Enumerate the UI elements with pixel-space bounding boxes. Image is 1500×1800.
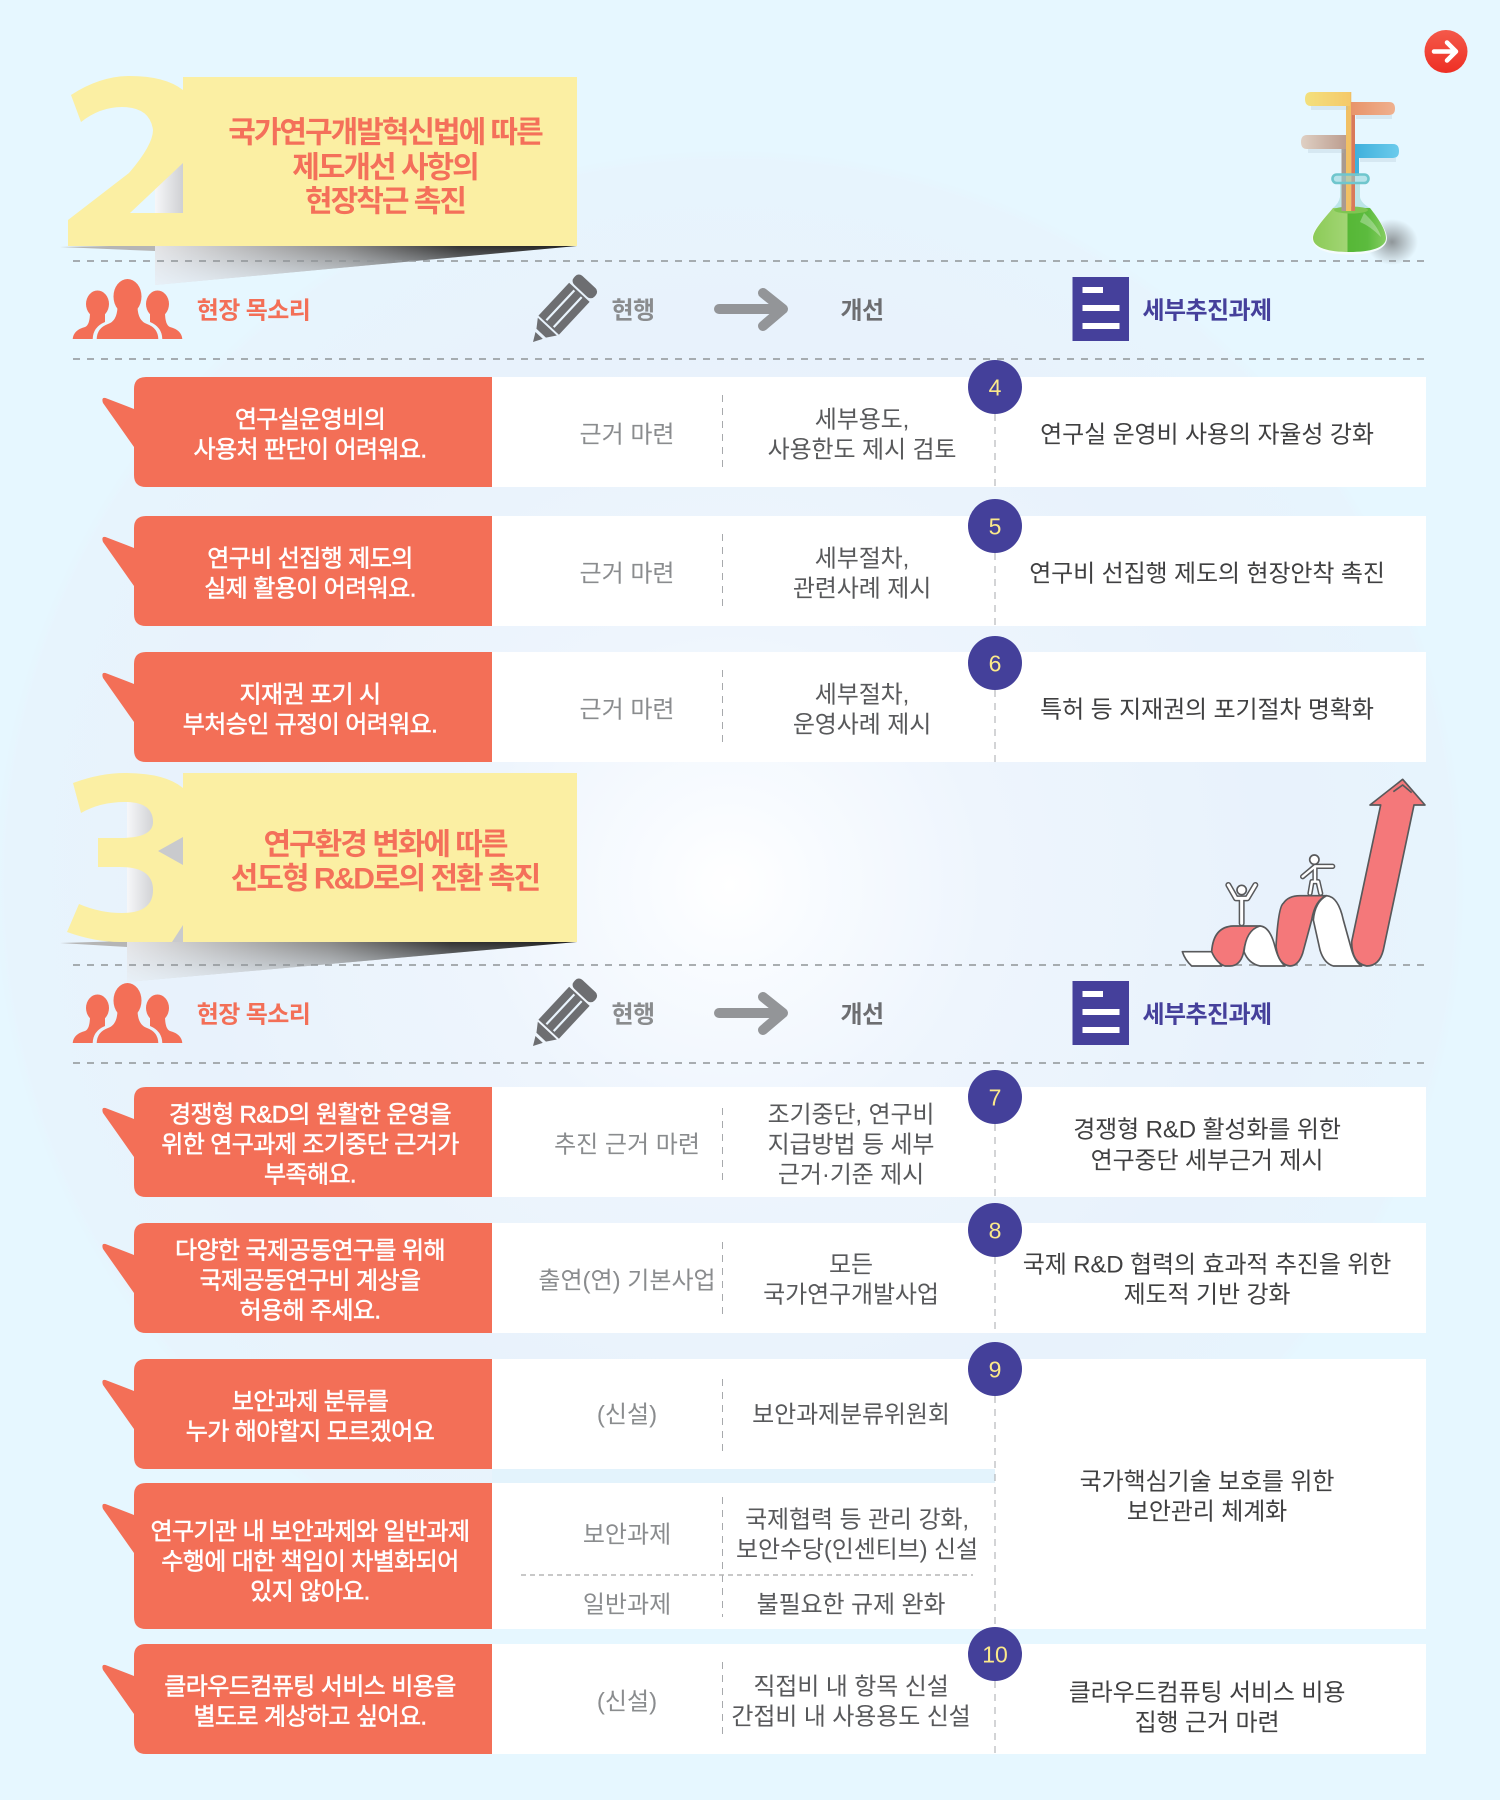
- title box: [183, 773, 577, 942]
- title box: 연구환경 변화에 따른: [263, 828, 508, 862]
- badge 5: [968, 499, 1022, 553]
- bubble: classification: 보안과제 분류를: [232, 1388, 388, 1416]
- badge 7: 7: [989, 1084, 1001, 1110]
- table cells: 연구중단 세부근거 제시: [1091, 1148, 1323, 1174]
- icon: red next arrow button: [1424, 30, 1468, 73]
- header: current: 현행: [612, 1002, 654, 1028]
- table cells: 연구실 운영비 사용의 자율성 강화: [1040, 422, 1374, 448]
- bubble: 연구비 선집행 제도의: [207, 546, 413, 572]
- badge 6: [968, 636, 1022, 690]
- panel: section 3 column headers: [73, 976, 1271, 1056]
- table cells: 보안관리 체계화: [1127, 1498, 1287, 1526]
- bubble: 다양한 국제공동연구를 위해: [175, 1238, 445, 1264]
- row 6: [102, 652, 1426, 762]
- bubble: 국제공동연구비 계상을: [200, 1268, 420, 1294]
- badge 5: 5: [989, 514, 1001, 540]
- icon: document: [1072, 981, 1129, 1045]
- table cells: 클라우드컴퓨팅 서비스 비용: [1069, 1680, 1345, 1706]
- table cells: 보안수당(인센티브) 신설: [736, 1536, 978, 1564]
- badge 10: 10: [982, 1642, 1008, 1668]
- arrow: [719, 293, 783, 326]
- header: detailed tasks: 세부추진과제: [1143, 298, 1271, 324]
- row 5: [102, 516, 1426, 626]
- table cells: 모든: [829, 1252, 873, 1278]
- row 7: [102, 1087, 1426, 1197]
- table cells: 근거 마련: [580, 696, 674, 724]
- row 4: [102, 377, 1426, 487]
- table cells: 국가핵심기술 보호를 위한: [1080, 1468, 1334, 1496]
- arrow: [719, 997, 783, 1030]
- bubble: classification: [102, 1359, 492, 1469]
- header: improvement: 개선: [841, 1002, 883, 1028]
- bubble: 부처승인 규정이 어려워요.: [183, 712, 437, 738]
- table cells: 지급방법 등 세부: [768, 1132, 934, 1158]
- table cells: 집행 근거 마련: [1135, 1710, 1279, 1736]
- table cells: 특허 등 지재권의 포기절차 명확화: [1040, 696, 1374, 724]
- badge 7: [968, 1070, 1022, 1124]
- row 10: [102, 1644, 1426, 1754]
- table cells: 조기중단, 연구비: [768, 1102, 934, 1128]
- title box: 선도형 R&D로의 전환 촉진: [231, 862, 540, 896]
- bubble: 별도로 계상하고 싶어요.: [193, 1704, 427, 1730]
- bubble: responsibility: 연구기관 내 보안과제와 일반과제: [151, 1518, 469, 1546]
- bubble: classification: 누가 해야할지 모르겠어요: [186, 1418, 434, 1446]
- badge 8: [968, 1203, 1022, 1257]
- table cells: 일반과제: [583, 1592, 671, 1618]
- badge 9: 9: [989, 1356, 1001, 1382]
- table cells: 근거 마련: [580, 560, 674, 588]
- dashed divider section 3: [73, 965, 1426, 1063]
- table cells: 관련사례 제시: [793, 576, 931, 602]
- badge 9: [968, 1342, 1022, 1396]
- table cells: 국제협력 등 관리 강화,: [745, 1506, 969, 1534]
- table cells: 간접비 내 사용용도 신설: [731, 1704, 971, 1730]
- bubble: [102, 652, 492, 762]
- bubble: responsibility: 있지 않아요.: [250, 1578, 370, 1606]
- icon: flask with signpost: [1301, 92, 1418, 265]
- table cells: 근거·기준 제시: [778, 1162, 924, 1188]
- table cells: 세부절차,: [815, 682, 909, 708]
- bubble: [102, 377, 492, 487]
- table cells: [492, 516, 1426, 626]
- bubble: 허용해 주세요.: [239, 1298, 381, 1324]
- big numeral 3: [67, 773, 183, 942]
- table cells: 경쟁형 R&D 활성화를 위한: [1073, 1116, 1341, 1144]
- table cells: [492, 652, 1426, 762]
- bubble: responsibility: [102, 1483, 492, 1629]
- panel: section 2 column headers: [73, 272, 1271, 352]
- rows 9: security tasks: [102, 1359, 1426, 1629]
- table cells: 사용한도 제시 검토: [768, 436, 956, 464]
- badge 6: 6: [989, 650, 1001, 676]
- big numeral 2: [68, 76, 183, 246]
- table cells: (신설): [597, 1688, 657, 1716]
- table cells: [492, 1359, 1426, 1629]
- title box: [183, 77, 577, 246]
- icon: pencil: [523, 976, 599, 1056]
- table cells: [492, 1644, 1426, 1754]
- header: detailed tasks: 세부추진과제: [1143, 1002, 1271, 1028]
- bubble: 클라우드컴퓨팅 서비스 비용을: [164, 1674, 456, 1700]
- badge 10: [968, 1627, 1022, 1681]
- table cells: 출연(연) 기본사업: [538, 1268, 716, 1294]
- table cells: 불필요한 규제 완화: [757, 1592, 945, 1618]
- bubble: 지재권 포기 시: [239, 682, 381, 708]
- table cells: 연구비 선집행 제도의 현장안착 촉진: [1029, 560, 1385, 588]
- table cells: [492, 1223, 1426, 1333]
- table cells: [492, 377, 1426, 487]
- bubble: 사용처 판단이 어려워요.: [193, 436, 427, 464]
- table cells: (신설): [597, 1402, 657, 1428]
- number badges: [968, 360, 1022, 1681]
- table cells: [492, 1087, 1426, 1197]
- badge 8: 8: [989, 1218, 1001, 1244]
- bubble: 연구실운영비의: [235, 406, 385, 434]
- title box: 현장착근 촉진: [305, 186, 465, 218]
- header: improvement: 개선: [841, 298, 883, 324]
- table cells: 직접비 내 항목 신설: [753, 1674, 949, 1700]
- row 8: [102, 1223, 1426, 1333]
- bubble: 실제 활용이 어려워요.: [204, 576, 416, 602]
- bubble: responsibility: 수행에 대한 책임이 차별화되어: [161, 1548, 459, 1576]
- header: field voice: 현장 목소리: [197, 298, 310, 324]
- table cells: 근거 마련: [580, 422, 674, 448]
- panel: section 3 heading: [60, 773, 577, 982]
- table cells: 추진 근거 마련: [554, 1132, 700, 1158]
- bubble: [102, 516, 492, 626]
- header: field voice: 현장 목소리: [197, 1002, 310, 1028]
- bubble: 부족해요.: [264, 1162, 356, 1188]
- icon: people: [73, 279, 182, 339]
- table cells: 제도적 기반 강화: [1124, 1282, 1290, 1308]
- bubble: [102, 1223, 492, 1333]
- table cells: 세부용도,: [815, 406, 909, 434]
- bubble: [102, 1644, 492, 1754]
- table cells: 국가연구개발사업: [763, 1282, 939, 1308]
- icon: pencil: [523, 272, 599, 352]
- panel: section 2 heading: [60, 76, 577, 285]
- title box: 국가연구개발혁신법에 따른: [228, 116, 543, 150]
- title box: 제도개선 사항의: [292, 152, 478, 184]
- header: current: 현행: [612, 298, 654, 324]
- bubble: 경쟁형 R&D의 원활한 운영을: [169, 1102, 451, 1128]
- table cells: 국제 R&D 협력의 효과적 추진을 위한: [1023, 1252, 1391, 1278]
- table cells: 세부절차,: [815, 546, 909, 572]
- icon: document: [1072, 277, 1129, 341]
- icon: people: [73, 983, 182, 1043]
- dashed divider top: [73, 261, 1426, 359]
- table cells: 운영사례 제시: [793, 712, 931, 738]
- bubble: 위한 연구과제 조기중단 근거가: [161, 1132, 459, 1158]
- table cells: 보안과제분류위원회: [752, 1402, 950, 1428]
- badge 4: 4: [989, 374, 1002, 400]
- icon: growth ribbon arrow with people: [1182, 779, 1425, 966]
- table cells: 보안과제: [583, 1522, 671, 1548]
- bubble: [102, 1087, 492, 1197]
- badge 4: [968, 360, 1022, 414]
